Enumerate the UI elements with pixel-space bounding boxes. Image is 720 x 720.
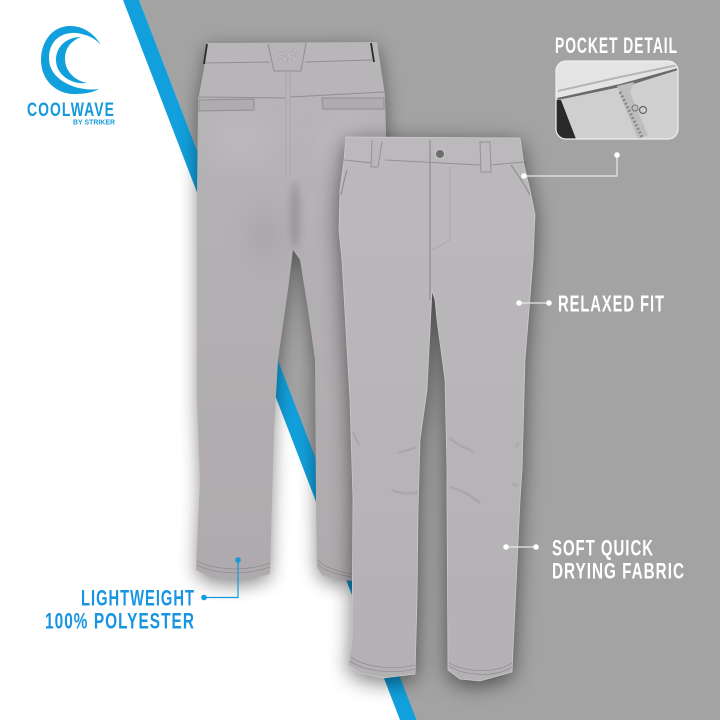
shadow: front pants xyxy=(339,142,535,686)
callout: pocket detail xyxy=(521,33,678,179)
label: soft quick drying fabric: SOFT QUICK xyxy=(552,536,654,560)
leader line: relaxed fit xyxy=(516,300,552,306)
blue diagonal band xyxy=(123,0,416,720)
leader dots: pocket xyxy=(521,152,620,179)
label: lightweight 100% polyester: LIGHTWEIGHT xyxy=(81,586,195,610)
callout: lightweight polyester xyxy=(45,557,241,634)
knee wrinkles xyxy=(353,432,519,503)
back pants silhouette xyxy=(196,42,386,581)
fabric shading: back pants xyxy=(262,182,302,248)
leader line: lightweight xyxy=(201,557,241,600)
logo on back waistband: SS xyxy=(278,49,296,65)
callout: soft quick drying fabric xyxy=(503,536,685,584)
logo wordmark: COOLWAVE xyxy=(27,99,115,121)
front pants silhouette xyxy=(339,137,535,681)
logo: Coolwave by Striker xyxy=(27,26,115,126)
front pants button xyxy=(436,150,444,158)
label: soft quick drying fabric xyxy=(552,536,685,584)
shadow: back pants xyxy=(196,47,386,586)
logo byline: BY STRIKER xyxy=(73,120,115,126)
back pants waistband details xyxy=(199,43,385,175)
front pants waistband xyxy=(341,140,530,300)
label: lightweight 100% polyester xyxy=(45,586,195,634)
back view pants xyxy=(196,42,386,586)
front view pants xyxy=(339,137,535,686)
callout: relaxed fit xyxy=(516,290,665,316)
leader line: fabric xyxy=(503,544,539,550)
hem stitching xyxy=(197,560,352,577)
belt edge shadows xyxy=(204,43,374,64)
pocket detail photo xyxy=(556,61,678,139)
logo wave mark xyxy=(41,26,101,94)
label: lightweight 100% polyester: 100% POLYESTER xyxy=(45,608,195,634)
hem stitching xyxy=(350,657,512,674)
leader line: pocket xyxy=(524,155,617,176)
